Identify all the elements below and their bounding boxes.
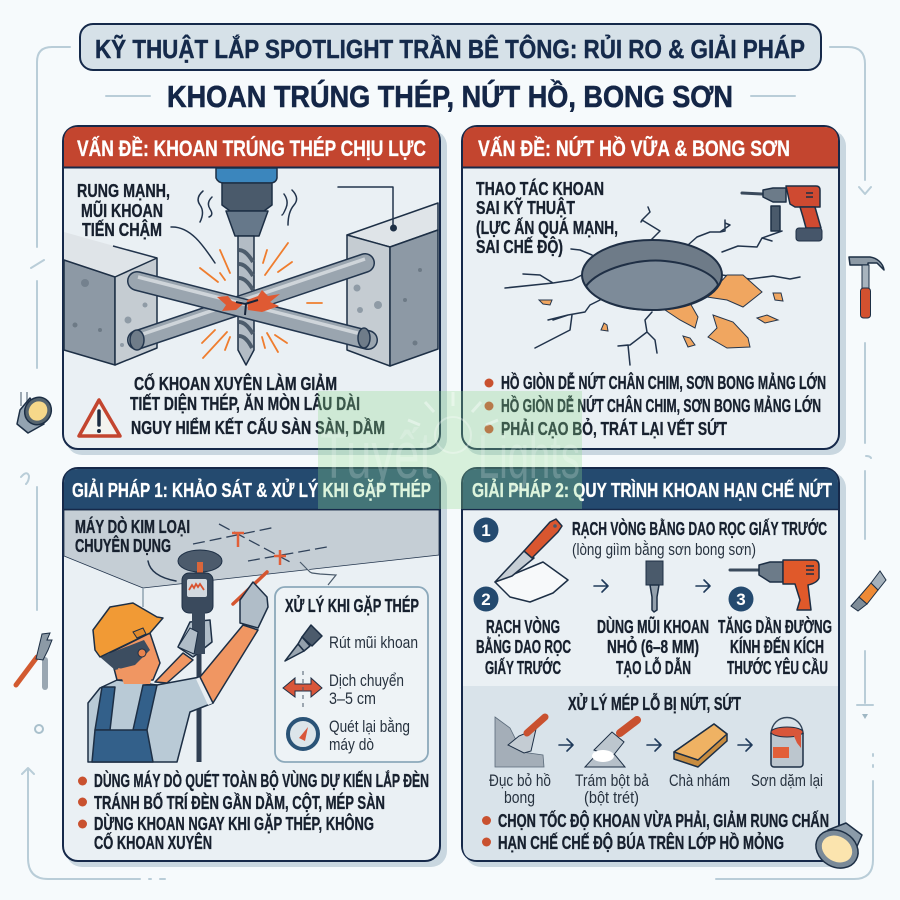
callout: what to do when hitting steel: Quét lại bằng: [329, 717, 410, 736]
bullets: HẠN CHẾ CHẾ ĐỘ BÚA TRÊN LỚP HỒ MỎNG: [498, 832, 784, 853]
repair captions: Đục bỏ hồ: [489, 772, 551, 790]
callout: what to do when hitting steel: máy dò: [329, 736, 374, 754]
panel heading: VẤN ĐỀ: NỨT HỒ VỮA & BONG SƠN: [478, 136, 790, 161]
label: wrong technique: SAI CHẾ ĐỘ): [476, 236, 563, 257]
watermark: [318, 391, 582, 509]
icon: paint can: [771, 718, 803, 767]
bullets: [78, 770, 429, 853]
icon: spotlight bottom right: [809, 822, 865, 876]
rebar crossing: [130, 259, 370, 350]
callout: what to do when hitting steel: [275, 587, 428, 762]
step badges: 1: [481, 521, 491, 540]
icon: red hammer drill: [742, 186, 822, 241]
step captions: NHỎ (6–8 MM): [607, 636, 699, 657]
icon: gauge: [288, 719, 318, 749]
text: consequences: NGUY HIỂM KẾT CẤU SÀN SÀN, DẦM: [131, 417, 385, 438]
icon: move arrow: [283, 671, 322, 707]
bullets: DÙNG MÁY DÒ QUÉT TOÀN BỘ VÙNG DỰ KIẾN LẮP ĐÈN: [94, 770, 429, 791]
arrow: [559, 739, 573, 751]
step badges: [474, 518, 754, 612]
icon: small drill bit: [646, 561, 663, 612]
bullets: CỐ KHOAN XUYÊN: [94, 832, 212, 853]
text: consequences: CỐ KHOAN XUYÊN LÀM GIẢM: [134, 373, 337, 394]
icon: knife and paper: [495, 519, 568, 602]
step heading text: [572, 518, 827, 559]
step captions: TẠO LỖ DẪN: [616, 657, 691, 678]
label: vibration: RUNG MẠNH,: [77, 181, 170, 201]
panel: problem cracked plaster: [462, 126, 846, 455]
step captions: BẰNG DAO RỌC: [476, 636, 571, 657]
watermark: Lights: [478, 423, 580, 492]
icon: brush right: [851, 571, 886, 611]
step captions: THƯỚC YÊU CẦU: [727, 657, 828, 678]
worker with detector: [88, 550, 268, 762]
icon: orange drill: [730, 560, 819, 610]
icon: hammer right: [849, 257, 884, 318]
ceiling: [64, 510, 439, 588]
label: vibration: MŨI KHOAN: [81, 200, 163, 221]
arrow: [738, 739, 752, 751]
step badges: 2: [481, 590, 491, 609]
right concrete block: [347, 203, 438, 366]
panel: solution 2: [462, 468, 846, 867]
label: metal detector: MÁY DÒ KIM LOẠI: [75, 516, 190, 537]
label: wrong technique: SAI KỸ THUẬT: [476, 197, 575, 218]
label: wrong technique: THAO TÁC KHOAN: [476, 178, 604, 199]
arrow: [647, 739, 661, 751]
repair captions: bong: [504, 789, 535, 807]
text: consequences: [130, 373, 385, 438]
label: wrong technique: (LỰC ẤN QUÁ MẠNH,: [476, 217, 618, 238]
panel: problem drilling into rebar: [63, 126, 447, 455]
step badges: 3: [736, 590, 746, 609]
bullets: PHẢI CẠO BỎ, TRÁT LẠI VẾT SỨT: [501, 418, 727, 439]
sub-heading: edge repair: XỬ LÝ MÉP LỖ BỊ NỨT, SỨT: [568, 693, 741, 714]
label: vibration: TIẾN CHẬM: [82, 219, 162, 240]
step captions: TĂNG DẦN ĐƯỜNG: [718, 616, 832, 637]
label: vibration: [77, 181, 170, 240]
icon: wrench left: [16, 633, 52, 687]
repair captions: Trám bột bả: [575, 772, 650, 790]
icon: putty knife: [585, 720, 637, 767]
subtitle heading: KHOAN TRÚNG THÉP, NỨT HỒ, BONG SƠN: [167, 78, 733, 114]
vibration marks and sparks: [198, 190, 322, 358]
bullets: [484, 372, 826, 439]
label: wrong technique: [476, 178, 618, 257]
icon: spotlight left: [17, 392, 57, 433]
repair captions: (bột trét): [584, 789, 639, 807]
icon: chisel on plaster: [495, 717, 545, 767]
text: consequences: TIẾT DIỆN THÉP, ĂN MÒN LÂU DÀI: [130, 393, 360, 414]
callout: what to do when hitting steel: Rút mũi khoan: [329, 634, 418, 652]
bullets: [482, 810, 829, 853]
watermark: Tuyết: [320, 418, 432, 492]
repair captions: [489, 772, 823, 807]
step captions: KÍNH ĐẾN KÍCH: [730, 636, 824, 657]
panel: solution 1: [63, 468, 447, 867]
icon: drill bit: [285, 625, 322, 661]
bullets: DỪNG KHOAN NGAY KHI GẶP THÉP, KHÔNG: [94, 813, 374, 834]
step captions: RẠCH VÒNG: [486, 616, 560, 637]
icon: warning triangle: [79, 400, 120, 436]
ceiling rebar marks: [148, 524, 336, 585]
panel heading: GIẢI PHÁP 1: KHẢO SÁT & XỬ LÝ KHI GẶP THÉP: [72, 478, 431, 502]
arrow: [594, 580, 608, 592]
label: metal detector: CHUYÊN DỤNG: [75, 535, 171, 556]
detector pole: [196, 650, 202, 762]
left concrete block: [64, 232, 157, 365]
label: metal detector: [75, 516, 190, 556]
step heading text: (lòng giìm bằng sơn bong sơn): [572, 540, 756, 559]
repair captions: Sơn dặm lại: [751, 772, 823, 790]
title banner: [80, 24, 821, 70]
step captions: DÙNG MŨI KHOAN: [597, 616, 709, 637]
callout: what to do when hitting steel: XỬ LÝ KHI GẶP THÉP: [285, 595, 419, 616]
panel heading: VẤN ĐỀ: KHOAN TRÚNG THÉP CHỊU LỰC: [77, 136, 426, 161]
step captions: [476, 616, 832, 678]
icon: sanding sponge: [674, 724, 727, 767]
repair captions: Chà nhám: [669, 772, 730, 790]
callout: what to do when hitting steel: 3–5 cm: [329, 690, 376, 708]
title banner: KỸ THUẬT LẮP SPOTLIGHT TRẦN BÊ TÔNG: RỦI RO & GIẢI PHÁP: [95, 33, 805, 64]
arrow: [696, 580, 710, 592]
step captions: GIẤY TRƯỚC: [485, 657, 561, 678]
callout lines: [171, 187, 393, 263]
drill: [216, 168, 277, 365]
bullets: TRÁNH BỐ TRÍ ĐÈN GẦN DẦM, CỘT, MÉP SÀN: [94, 792, 385, 813]
illustration: cracks and flakes: [505, 207, 800, 365]
callout: what to do when hitting steel: Dịch chuyển: [329, 672, 404, 690]
